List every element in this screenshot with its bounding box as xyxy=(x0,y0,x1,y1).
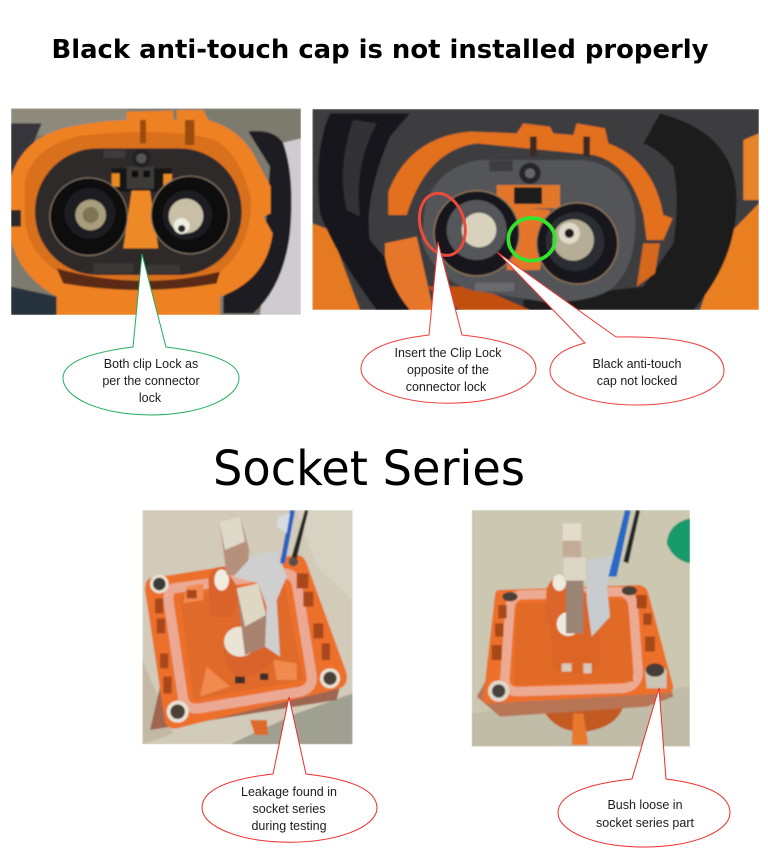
green circle marker xyxy=(508,218,555,261)
callout: insert the clip lock: connector lock xyxy=(406,380,487,394)
callout: black anti-touch cap xyxy=(497,252,724,405)
callout: insert the clip lock: Insert the Clip Lock xyxy=(394,346,502,360)
callout: leakage: socket series xyxy=(253,802,325,816)
callout: black anti-touch cap: Black anti-touch xyxy=(593,357,682,371)
callout: both clip lock: per the connector xyxy=(102,374,200,388)
callout: insert the clip lock: opposite of the xyxy=(407,363,489,377)
callout: insert the clip lock xyxy=(361,242,536,403)
title: Black anti-touch cap is not installed properly xyxy=(52,35,709,65)
photo: socket series leakage xyxy=(142,510,353,744)
photo: connector with correct clip lock xyxy=(11,108,301,315)
callout: leakage: Leakage found in xyxy=(241,785,337,799)
callout: both clip lock: lock xyxy=(139,391,162,405)
callout: both clip lock xyxy=(63,254,239,415)
callout: leakage xyxy=(202,697,377,842)
callout: both clip lock: Both clip Lock as xyxy=(104,357,198,371)
callout: leakage: during testing xyxy=(251,819,327,833)
callout: bush loose: Bush loose in xyxy=(607,798,683,812)
photo: socket series loose bush xyxy=(472,510,690,747)
photo: connector with wrong clip lock xyxy=(312,109,759,310)
section heading: Socket Series xyxy=(213,441,525,497)
callout: bush loose xyxy=(558,688,730,847)
callout: bush loose: socket series part xyxy=(596,816,694,830)
callout: black anti-touch cap: cap not locked xyxy=(597,374,677,388)
red circle marker xyxy=(418,192,467,257)
